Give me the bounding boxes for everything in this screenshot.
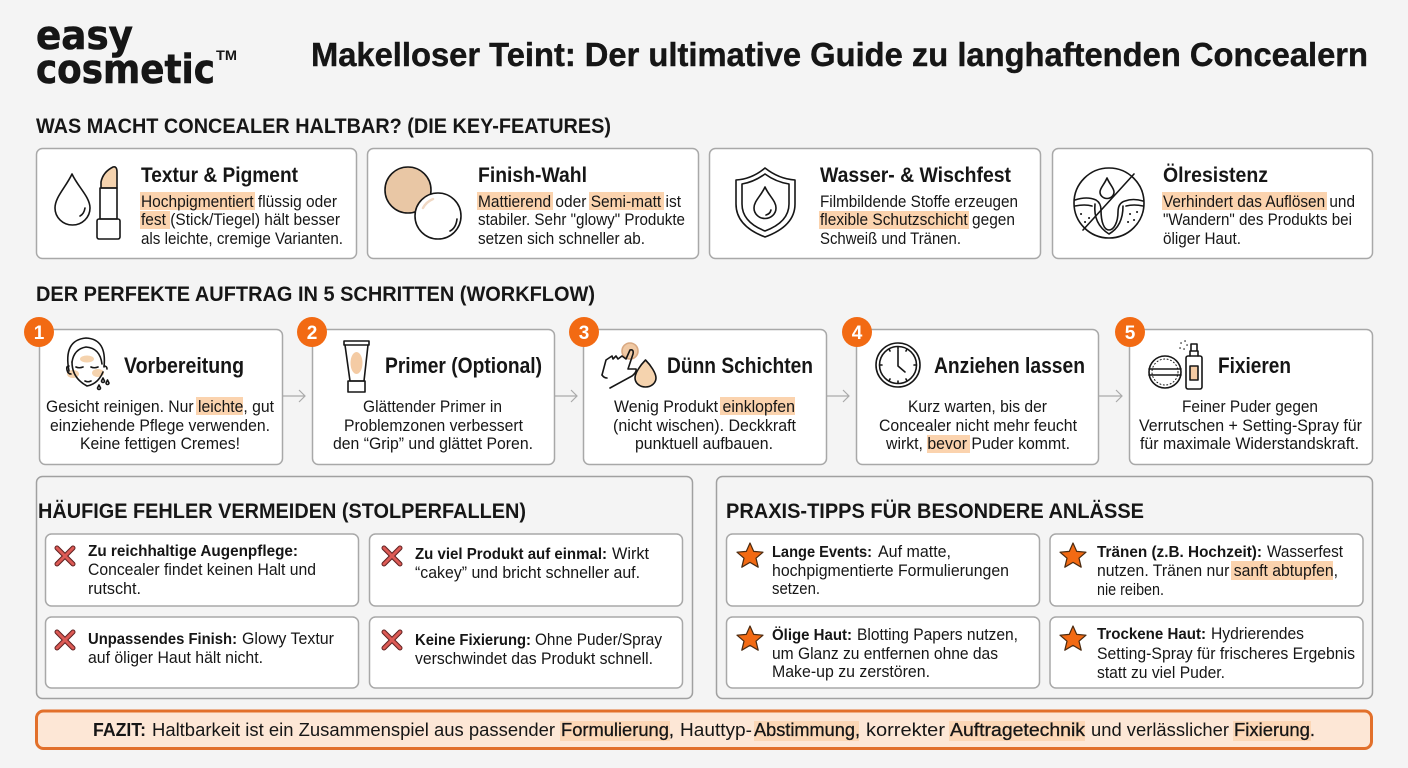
panel: step 5 Fixieren: Fixieren xyxy=(1218,353,1291,378)
panel: step 5 Fixieren: Feiner Puder gegen xyxy=(1182,398,1318,416)
panel: Finish-Wahl: Mattierend oder Semi-matt ist xyxy=(478,193,681,211)
tip: Trockene Haut: Hydrierendes xyxy=(1211,625,1304,643)
mistake: zu viel Produkt: Zu viel Produkt auf einmal: xyxy=(415,546,607,563)
tip: Tränen: nutzen. Tränen nur sanft abtupfen, xyxy=(1097,562,1338,580)
icon: cross xyxy=(384,632,400,648)
mistake: Keine Fixierung: Keine Fixierung: xyxy=(415,632,531,649)
panel: Ölresistenz xyxy=(1052,148,1372,258)
tip: Ölige Haut: Ölige Haut: xyxy=(772,625,852,644)
panel: step 3 Dünn Schichten: Wenig Produkt einklopfen xyxy=(614,398,795,416)
panel: Ölresistenz: "Wandern" des Produkts bei xyxy=(1163,211,1352,229)
tip: Trockene Haut: statt zu viel Puder. xyxy=(1097,664,1225,682)
panel: Textur und Pigment: Textur & Pigment xyxy=(141,164,298,187)
panel: step 3 Dünn Schichten xyxy=(569,317,826,464)
mistake: Unpassendes Finish: auf öliger Haut hält nicht. xyxy=(88,649,263,667)
panel: step 5 Fixieren xyxy=(1115,317,1372,464)
tip: Tränen xyxy=(1050,534,1363,606)
mistake: Keine Fixierung: verschwindet das Produkt schnell. xyxy=(415,650,653,668)
tip: Tränen: nie reiben. xyxy=(1097,581,1164,599)
panel: step 2 Primer: Glättender Primer in xyxy=(363,398,502,416)
panel: Finish-Wahl: Finish-Wahl xyxy=(478,164,587,187)
arrow: step 1 to 2 xyxy=(283,390,305,402)
panel: Textur und Pigment: fest (Stick/Tiegel) hält besser xyxy=(141,211,340,229)
panel: Praxis-Tipps xyxy=(716,476,1372,698)
tip: Tränen: Wasserfest xyxy=(1267,543,1343,561)
panel: Finish-Wahl: stabiler. Sehr "glowy" Produkte xyxy=(478,211,685,229)
heading: workflow: DER PERFEKTE AUFTRAG IN 5 SCHRITTEN (WORKFLOW) xyxy=(36,282,595,306)
title: Makelloser Teint: Der ultimative Guide zu langhaftenden Concealern xyxy=(311,36,1368,73)
panel: Ölresistenz: Ölresistenz xyxy=(1163,164,1268,187)
panel: step 1 Vorbereitung: Keine fettigen Cremes! xyxy=(80,435,240,453)
mistake: zu viel Produkt xyxy=(370,534,682,606)
panel: step 1 Vorbereitung: einziehende Pflege verwenden. xyxy=(50,417,270,435)
icon: clock xyxy=(876,343,920,387)
callout: Fazit: FAZIT: xyxy=(93,719,146,740)
icon: drop and lipstick xyxy=(55,167,120,239)
callout: Fazit xyxy=(36,711,1372,748)
icon: cross xyxy=(57,632,73,648)
tip: Lange Events: Auf matte, xyxy=(878,543,951,561)
tip: Trockene Haut xyxy=(1050,617,1363,688)
panel: step 2 Primer: Primer (Optional) xyxy=(385,353,542,378)
icon: primer tube xyxy=(344,341,369,392)
icon: star xyxy=(1060,543,1086,567)
heading: key features: WAS MACHT CONCEALER HALTBAR? (DIE KEY-FEATURES) xyxy=(36,114,611,138)
arrow: step 2 to 3 xyxy=(555,390,577,402)
mistake: Unpassendes Finish xyxy=(46,617,358,688)
callout: Fazit: Auftragetechnik xyxy=(950,719,1086,740)
icon: star xyxy=(737,626,763,650)
logo: easy xyxy=(36,13,133,59)
badge: 5 xyxy=(1115,317,1145,347)
panel: step 4 Anziehen lassen: Concealer nicht mehr feucht xyxy=(879,417,1077,435)
panel: Finish-Wahl xyxy=(368,148,698,258)
panel: Ölresistenz: öliger Haut. xyxy=(1163,230,1241,248)
panel: step 4 Anziehen lassen: wirkt, bevor Puder kommt. xyxy=(885,435,1070,453)
mistake: Augenpflege: Zu reichhaltige Augenpflege: xyxy=(88,543,298,560)
badge: 4 xyxy=(842,317,872,347)
mistake: Unpassendes Finish: Unpassendes Finish: xyxy=(88,631,237,648)
panel: Finish-Wahl: setzen sich schneller ab. xyxy=(478,230,645,248)
panel: step 5 Fixieren: für maximale Widerstandskraft. xyxy=(1140,435,1359,453)
icon: powder puff and setting spray xyxy=(1149,341,1202,389)
icon: star xyxy=(1060,626,1086,650)
callout: Fazit: Formulierung, xyxy=(561,719,674,740)
mistake: zu viel Produkt: “cakey” und bricht schneller auf. xyxy=(415,564,640,582)
mistake: Augenpflege xyxy=(46,534,358,606)
callout: Fazit: Haltbarkeit ist ein Zusammenspiel aus passender xyxy=(152,719,555,740)
callout: Fazit: Hauttyp- xyxy=(680,719,752,740)
panel: step 1 Vorbereitung: Vorbereitung xyxy=(124,353,244,378)
callout: Fazit: Fixierung. xyxy=(1234,719,1315,740)
tip: Lange Events xyxy=(726,534,1040,606)
panel: step 1 Vorbereitung: Gesicht reinigen. Nur leichte, gut xyxy=(46,398,274,416)
mistake: Augenpflege: rutscht. xyxy=(88,580,141,598)
panel: Wasser- und Wischfest: Wasser- & Wischfest xyxy=(820,164,1011,187)
badge: 2: 2 xyxy=(307,323,317,344)
badge: 2 xyxy=(297,317,327,347)
icon: tapping hand and sponge xyxy=(602,343,656,388)
panel: Wasser- und Wischfest: flexible Schutzschicht gegen xyxy=(820,211,1015,229)
panel: step 5 Fixieren: Verrutschen + Setting-Spray für xyxy=(1139,417,1362,435)
tip: Lange Events: Lange Events: xyxy=(772,544,872,561)
callout: Fazit: Abstimmung, xyxy=(754,719,860,740)
callout: Fazit: korrekter xyxy=(866,719,945,740)
badge: 5: 5 xyxy=(1125,323,1136,344)
panel: step 2 Primer xyxy=(297,317,554,464)
tip: Ölige Haut: Make-up zu zerstören. xyxy=(772,663,930,681)
badge: 3: 3 xyxy=(579,323,589,344)
heading: Praxis-Tipps: PRAXIS-TIPPS FÜR BESONDERE ANLÄSSE xyxy=(726,498,1144,523)
tip: Trockene Haut: Setting-Spray für frischeres Ergebnis xyxy=(1097,645,1355,663)
panel: Textur und Pigment: als leichte, cremige Varianten. xyxy=(141,230,343,248)
tip: Lange Events: hochpigmentierte Formulierungen xyxy=(772,562,1009,580)
logo: cosmetic xyxy=(36,47,215,93)
icon: star xyxy=(737,543,763,567)
tip: Lange Events: setzen. xyxy=(772,580,820,598)
icon: cross xyxy=(384,548,400,564)
badge: 1: 1 xyxy=(34,323,45,344)
panel: Ölresistenz: Verhindert das Auflösen und xyxy=(1163,193,1355,211)
logo xyxy=(36,13,237,93)
panel: Wasser- und Wischfest: Schweiß und Tränen. xyxy=(820,230,961,248)
panel: step 2 Primer: den “Grip” und glättet Poren. xyxy=(333,435,533,453)
icon: face with cleansing pad xyxy=(67,338,109,390)
mistake: Unpassendes Finish: Glowy Textur xyxy=(242,630,335,648)
badge: 3 xyxy=(569,317,599,347)
mistake: zu viel Produkt: Wirkt xyxy=(612,545,650,563)
arrow: step 3 to 4 xyxy=(827,390,849,402)
panel: step 2 Primer: Problemzonen verbessert xyxy=(344,417,523,435)
icon: shield with drop xyxy=(736,168,795,237)
logo: TM xyxy=(216,47,237,63)
icon: oil-resistant skin xyxy=(1074,168,1144,238)
panel: step 4 Anziehen lassen xyxy=(842,317,1098,464)
panel: step 1 Vorbereitung xyxy=(24,317,282,464)
tip: Ölige Haut xyxy=(726,617,1040,688)
tip: Ölige Haut: Blotting Papers nutzen, xyxy=(857,626,1018,644)
tip: Tränen: Tränen (z.B. Hochzeit): xyxy=(1097,544,1262,561)
heading: Stolperfallen: HÄUFIGE FEHLER VERMEIDEN (STOLPERFALLEN) xyxy=(38,499,526,523)
panel: step 4 Anziehen lassen: Anziehen lassen xyxy=(934,353,1085,378)
badge: 1 xyxy=(24,317,54,347)
panel: Textur und Pigment: Hochpigmentiert flüssig oder xyxy=(141,193,337,211)
panel: Wasser- und Wischfest xyxy=(710,148,1040,258)
icon: cross xyxy=(57,548,73,564)
mistake: Keine Fixierung: Ohne Puder/Spray xyxy=(535,631,663,649)
panel: Wasser- und Wischfest: Filmbildende Stoffe erzeugen xyxy=(820,193,1018,211)
mistake: Augenpflege: Concealer findet keinen Halt und xyxy=(88,561,316,579)
panel: step 3 Dünn Schichten: (nicht wischen). Deckkraft xyxy=(613,417,796,435)
badge: 4: 4 xyxy=(852,323,863,344)
panel: step 3 Dünn Schichten: punktuell aufbauen. xyxy=(635,435,773,453)
panel: step 3 Dünn Schichten: Dünn Schichten xyxy=(667,353,813,378)
panel: Textur und Pigment xyxy=(36,148,356,258)
mistake: Keine Fixierung xyxy=(370,617,682,688)
arrow: step 4 to 5 xyxy=(1099,390,1122,402)
panel: Stolperfallen xyxy=(36,476,692,698)
tip: Trockene Haut: Trockene Haut: xyxy=(1097,626,1206,643)
panel: step 4 Anziehen lassen: Kurz warten, bis der xyxy=(908,398,1047,416)
callout: Fazit: und verlässlicher xyxy=(1091,719,1229,740)
tip: Ölige Haut: um Glanz zu entfernen ohne das xyxy=(772,645,998,663)
icon: matte and glowy compacts xyxy=(385,167,461,239)
